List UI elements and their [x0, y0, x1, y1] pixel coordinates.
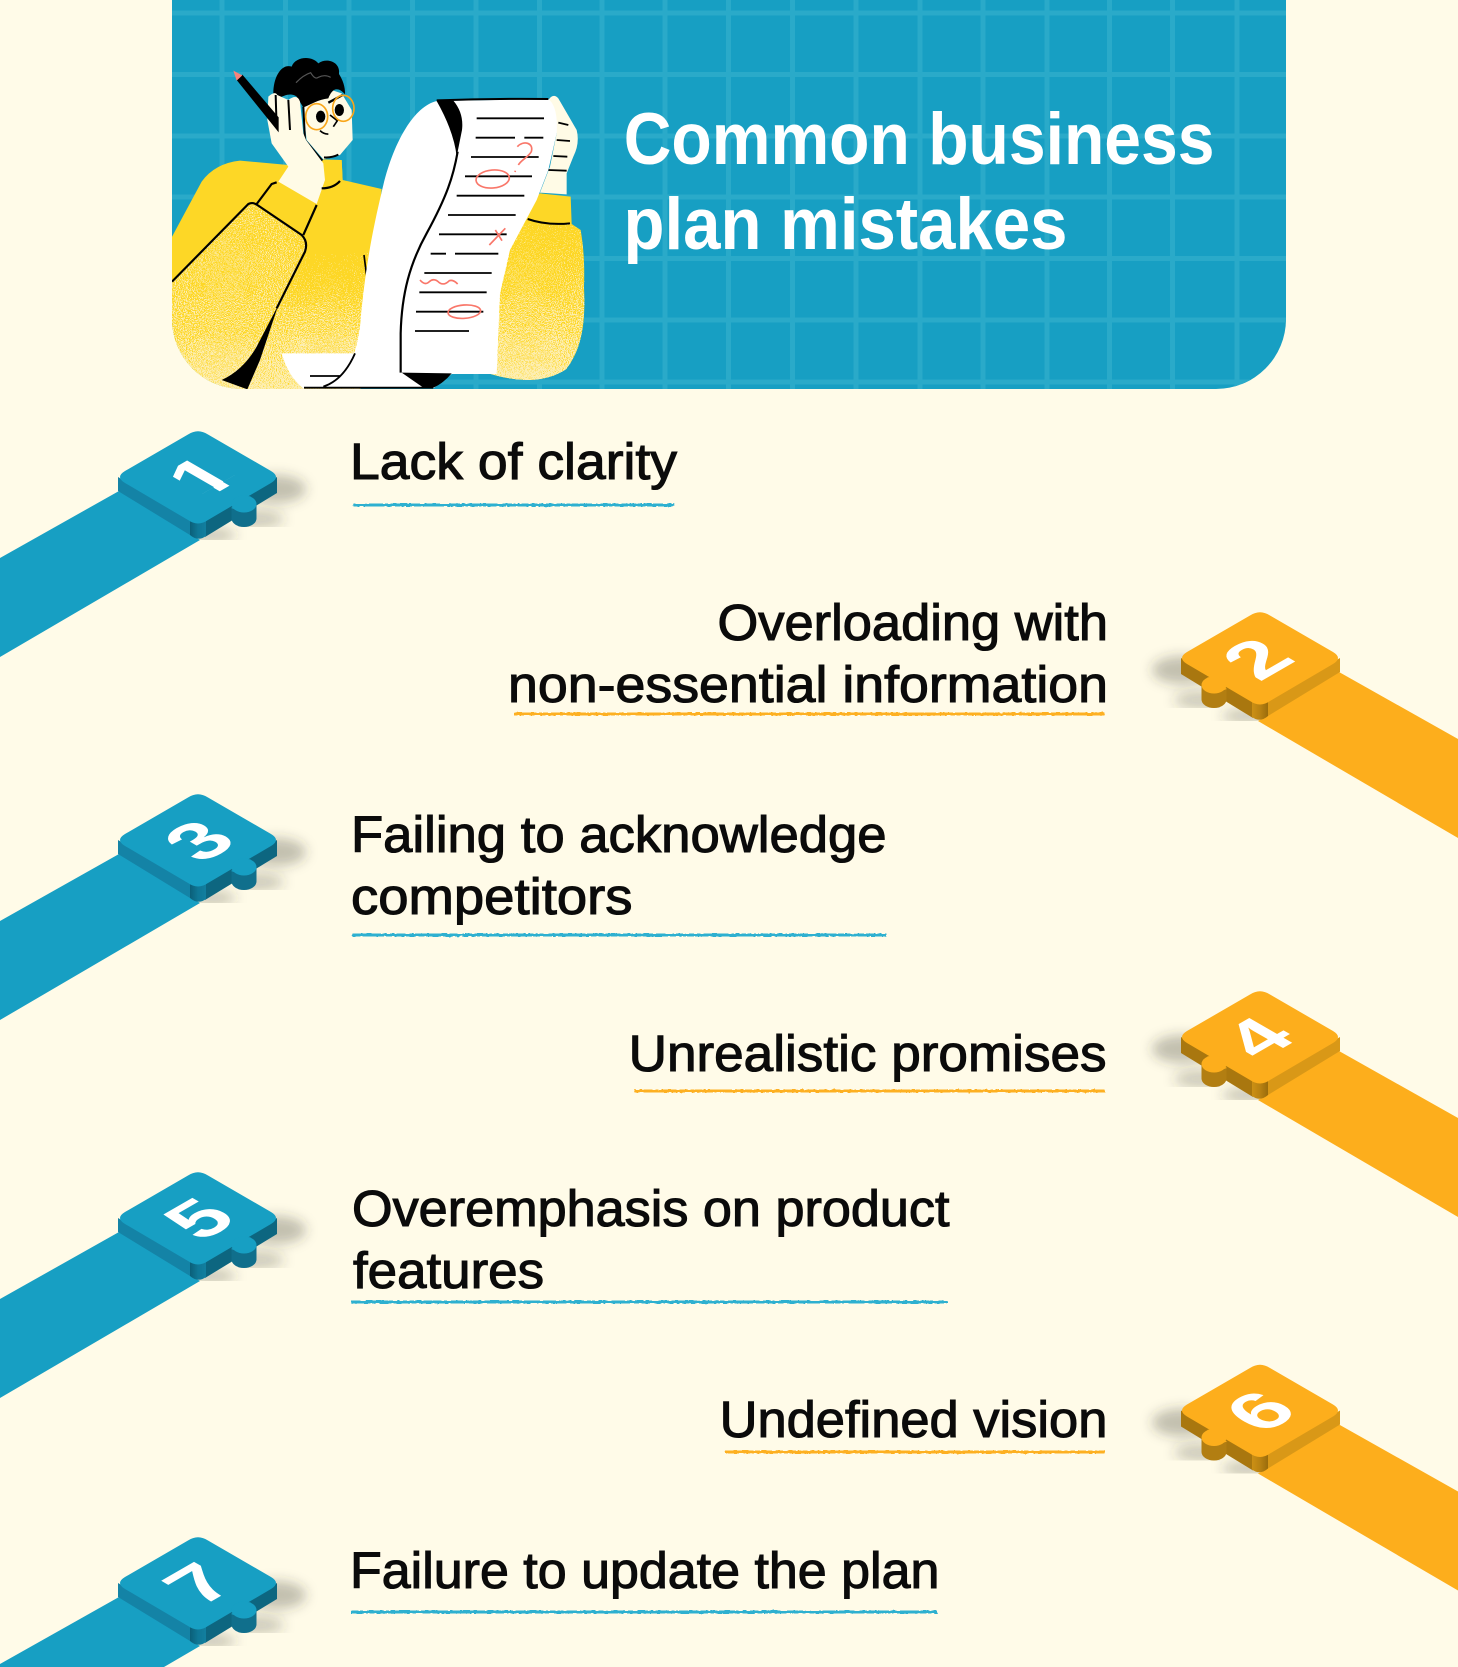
- item 2 label: [508, 594, 1108, 716]
- icon: red correction marks: [420, 143, 532, 319]
- item 6 marker: [1152, 1365, 1458, 1590]
- item 3 marker: 3: [146, 810, 254, 872]
- icon: far arm sleeve: [490, 193, 584, 380]
- icon: pencil: [233, 71, 279, 132]
- item 4 label: Unrealistic promises: [629, 1025, 1107, 1082]
- item 7 marker: [0, 1537, 306, 1667]
- item 5 marker: 5: [146, 1188, 254, 1250]
- panel: header banner: [167, 0, 1286, 393]
- item 6 label: Undefined vision: [720, 1391, 1107, 1448]
- icon: face: [303, 88, 353, 161]
- item 7 label: Failure to update the plan: [350, 1542, 939, 1599]
- item 2 marker: [1152, 612, 1458, 838]
- item 1 marker: 1: [149, 446, 257, 508]
- icon: collar: [323, 159, 343, 180]
- item 3 label: Failing to acknowledge: [351, 806, 887, 863]
- item 6 marker: 6: [1207, 1380, 1315, 1443]
- icon: far hand holding the paper: [540, 96, 578, 194]
- title: plan mistakes: [624, 184, 1068, 265]
- title: Common business: [624, 99, 1214, 180]
- item 4 marker: 4: [1205, 1007, 1313, 1069]
- illustration: person reading a long document: [167, 58, 584, 393]
- item 2 label: non-essential information: [508, 656, 1108, 713]
- item 1 label: Lack of clarity: [350, 433, 678, 490]
- item 5 label: [351, 1180, 950, 1304]
- icon: yellow sweater body: [167, 160, 382, 393]
- icon: hand on cheek: [267, 93, 325, 204]
- icon: raised forearm: [167, 181, 340, 390]
- icon: hair: [273, 58, 345, 107]
- item 2 label: Overloading with: [718, 594, 1108, 651]
- item 1 marker: [0, 431, 306, 657]
- item 4 marker: [1152, 991, 1458, 1217]
- item 5 marker: [0, 1172, 306, 1398]
- item 3 label: [351, 806, 887, 936]
- item 7 marker: 7: [146, 1553, 254, 1615]
- item 3 marker: [0, 794, 306, 1020]
- icon: text lines on paper: [415, 118, 544, 331]
- item 5 label: Overemphasis on product: [352, 1180, 950, 1237]
- icon: paper scroll: [282, 99, 557, 388]
- item 3 label: competitors: [351, 868, 632, 925]
- item 5 label: features: [353, 1242, 544, 1299]
- title: [624, 99, 1214, 265]
- item 2 marker: 2: [1204, 628, 1312, 690]
- icon: eyes and glasses: [306, 95, 354, 134]
